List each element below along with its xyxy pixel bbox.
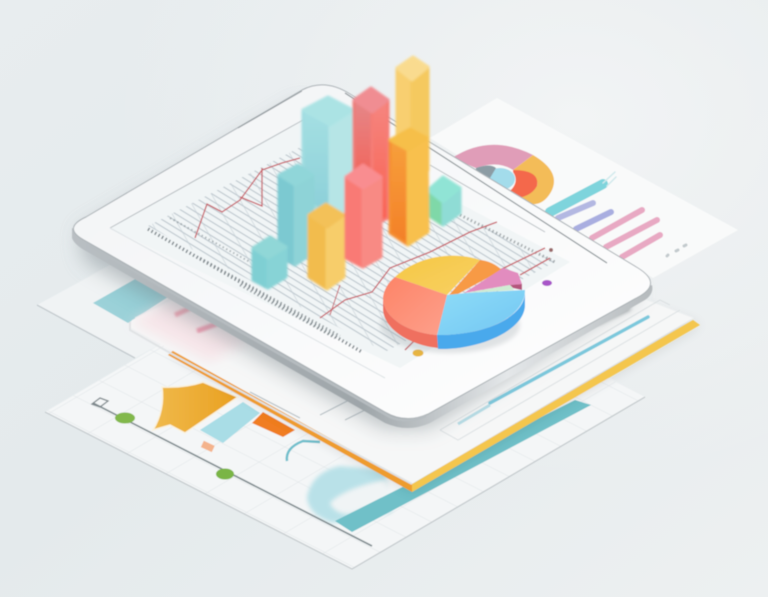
chart: teal area on left sheet <box>93 278 168 323</box>
tablet face <box>73 85 651 419</box>
page grey sketch lines <box>250 342 375 420</box>
smudges: pink bars on page <box>175 306 222 331</box>
bar: tall red <box>354 88 388 226</box>
slice: coral <box>383 277 447 335</box>
chart dots <box>412 248 553 356</box>
folder orange edge <box>168 348 420 492</box>
chart: teal band along sheet <box>335 400 591 532</box>
page inner frame <box>440 300 680 440</box>
bar: large cyan <box>303 97 353 220</box>
chart: blue curved arc <box>287 441 320 461</box>
tablet shadow smudge <box>597 308 630 323</box>
bar: mint small <box>428 177 460 225</box>
chart: horizontal bars on back sheet <box>550 172 686 257</box>
pie chart: 3D pie <box>380 256 525 353</box>
chart: teal blob near folder <box>400 428 428 440</box>
panel: back right report sheet <box>430 98 738 278</box>
chart: dark orange area shape <box>252 412 295 437</box>
slice: orange <box>449 260 502 295</box>
bar: medium teal <box>279 165 313 265</box>
pie side: blue <box>437 292 525 349</box>
folder page <box>130 200 693 484</box>
slice: pale green <box>466 285 514 293</box>
tick label rows <box>148 215 555 352</box>
chart: orange area shape <box>153 382 238 433</box>
axis line with markers <box>92 398 372 546</box>
chart: pale blue cloud area <box>307 466 392 523</box>
folder yellow side <box>412 320 700 492</box>
chart: light blue area shape <box>200 402 260 443</box>
bar: yellow <box>309 204 344 289</box>
slice: pink <box>464 268 522 293</box>
bar: small teal <box>253 237 286 288</box>
chart: small orange marker <box>201 441 215 452</box>
panel: tablet <box>72 85 652 428</box>
pie side: coral <box>383 297 438 348</box>
slice: yellow <box>395 256 480 295</box>
panel: lower report sheet <box>45 240 645 569</box>
bar: coral <box>346 165 381 267</box>
bar: pale yellow tall <box>397 57 428 170</box>
red trend lines <box>195 158 550 350</box>
bar chart: 3D columns <box>253 57 460 289</box>
tablet chart area <box>110 120 570 378</box>
panel: yellow folder with report page <box>130 200 700 492</box>
bar: orange <box>390 129 428 245</box>
page blue line <box>490 317 648 403</box>
slice: blue <box>437 290 525 335</box>
icon: donut chart on back sheet <box>452 145 554 204</box>
tablet edge <box>72 228 652 428</box>
pie shadow <box>380 297 520 353</box>
tint: pink wash on page <box>132 298 250 362</box>
panel: back left report sheet <box>37 248 240 358</box>
